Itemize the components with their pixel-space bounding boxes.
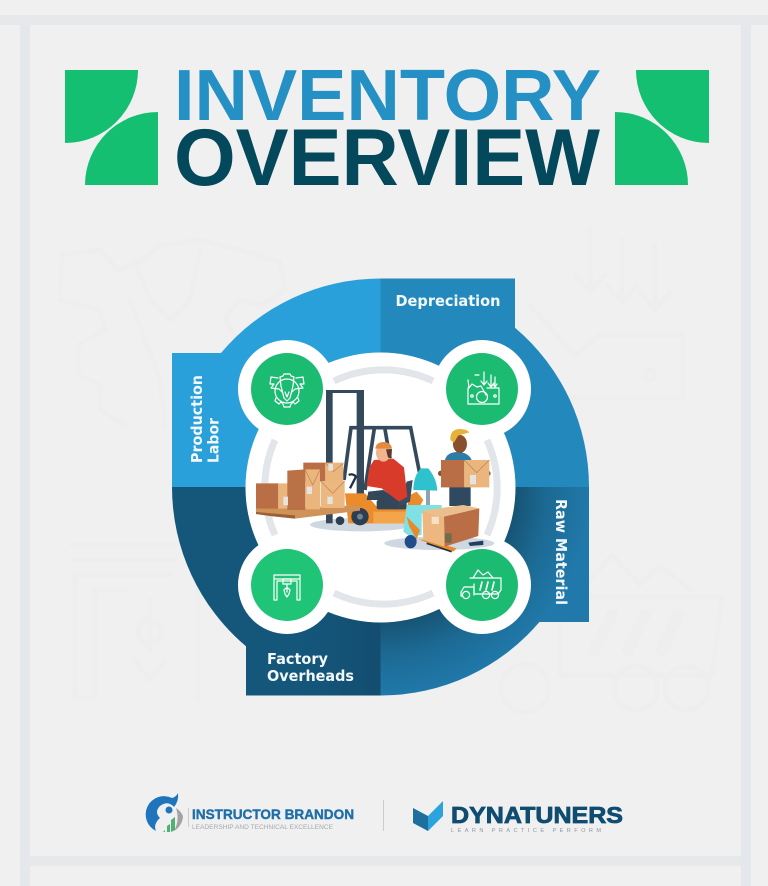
quadrant: factory overheads — [172, 487, 380, 696]
icon: mine truck — [446, 549, 518, 621]
diagram: four-part circle — [172, 278, 589, 696]
label: Production Labor: Production — [188, 375, 206, 463]
pallet with stacked boxes — [256, 463, 360, 519]
label: Factory Overheads — [267, 650, 354, 685]
title line: INVENTORY: INVENTORY — [174, 55, 601, 136]
logo check mark — [413, 801, 443, 831]
label: Factory Overheads: Factory — [267, 650, 328, 668]
logo tagline: LEARN PRACTICE PERFORM — [451, 828, 601, 834]
title — [174, 55, 601, 203]
quadrant: depreciation — [380, 278, 589, 487]
label: Production Labor — [188, 375, 222, 463]
logo mark — [146, 793, 183, 832]
logo: Instructor Brandon — [146, 793, 354, 832]
forklift mast — [326, 390, 364, 523]
forklift body — [336, 480, 423, 525]
inner white hub — [238, 340, 531, 634]
forklift cab frame — [344, 428, 419, 490]
decorative green leaves left — [65, 70, 158, 185]
background watermark: gear and wrench — [60, 240, 285, 425]
decorative green leaves right — [615, 70, 709, 185]
forklift driver — [349, 442, 407, 507]
background watermark: falling money — [525, 228, 683, 398]
pallet jack with box — [403, 468, 483, 552]
illustration: forklift and workers — [256, 390, 494, 552]
label: Depreciation: Depreciation — [396, 292, 500, 310]
worker carrying a box — [438, 429, 491, 506]
logo tagline: LEADERSHIP AND TECHNICAL EXCELLENCE — [192, 824, 333, 831]
icon: gantry crane — [251, 549, 323, 621]
logo name: DYNATUNERS — [451, 802, 623, 828]
quadrant: production labor — [172, 278, 380, 487]
icon: falling money — [446, 353, 518, 425]
label: Production Labor: Labor — [204, 417, 222, 463]
label: Factory Overheads: Overheads — [267, 667, 354, 685]
background watermark: mine truck — [501, 555, 722, 712]
icon: gear with wrenches — [251, 353, 323, 425]
label: Raw Material: Raw Material — [552, 499, 570, 605]
logo name: INSTRUCTOR BRANDON — [192, 807, 354, 822]
background watermark: gantry crane — [72, 545, 198, 700]
title line: OVERVIEW: OVERVIEW — [174, 113, 601, 203]
quadrant: raw material — [380, 487, 589, 696]
floor shadows — [310, 518, 494, 550]
logo: Dynatuners — [413, 801, 623, 834]
